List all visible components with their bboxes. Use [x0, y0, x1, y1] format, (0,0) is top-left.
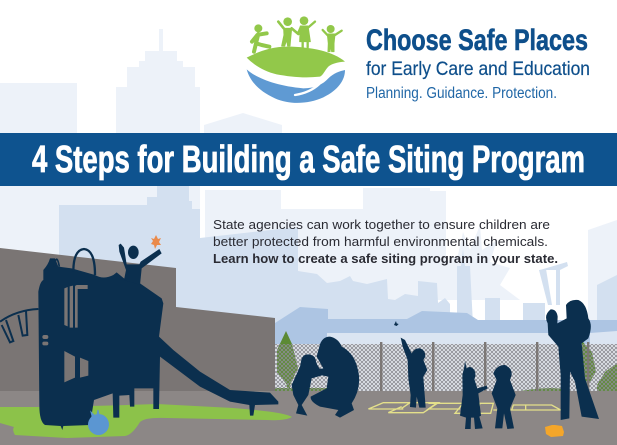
blue hand — [247, 69, 345, 103]
pale strip under overpass — [327, 330, 617, 346]
toddler — [492, 365, 516, 429]
logo mark — [247, 16, 345, 103]
intro text block — [213, 217, 558, 266]
child with adult — [292, 354, 323, 416]
intro text block: State agencies can work together to ensure children are — [213, 217, 550, 232]
playground structure silhouette — [0, 249, 278, 430]
dark blue distant hills and overpass — [275, 307, 617, 346]
child pointing up — [401, 338, 427, 408]
people silhouettes — [292, 300, 599, 429]
girl with ponytail — [460, 361, 488, 429]
green play surface — [0, 404, 292, 438]
title banner — [0, 133, 617, 186]
blue hopping ball — [88, 410, 109, 435]
child on top of playground — [119, 244, 162, 285]
butterfly — [394, 321, 399, 326]
medium blue skyline — [59, 186, 617, 325]
concrete wall — [0, 248, 275, 392]
hopscotch court — [368, 403, 561, 413]
logo — [247, 16, 590, 103]
intro text block: Learn how to create a safe siting program in your state. — [213, 251, 558, 266]
logo tagline: Planning. Guidance. Protection. — [366, 85, 557, 102]
orange toy on ground — [545, 425, 564, 437]
crouching adult — [310, 337, 359, 418]
playground openings — [42, 285, 88, 382]
orange leaf — [151, 235, 161, 249]
chain link fence — [274, 331, 617, 392]
four children — [252, 16, 342, 52]
mother holding baby — [546, 300, 599, 420]
fence posts — [380, 342, 589, 391]
green hill — [247, 47, 345, 77]
logo subtitle: for Early Care and Education — [366, 58, 590, 80]
monkey bars — [0, 309, 38, 342]
fence mesh — [274, 344, 617, 391]
pale city skyline — [0, 29, 617, 330]
intro text block: better protected from harmful environmental chemicals. — [213, 234, 548, 249]
ground — [0, 391, 617, 445]
trees behind fence — [274, 331, 617, 392]
